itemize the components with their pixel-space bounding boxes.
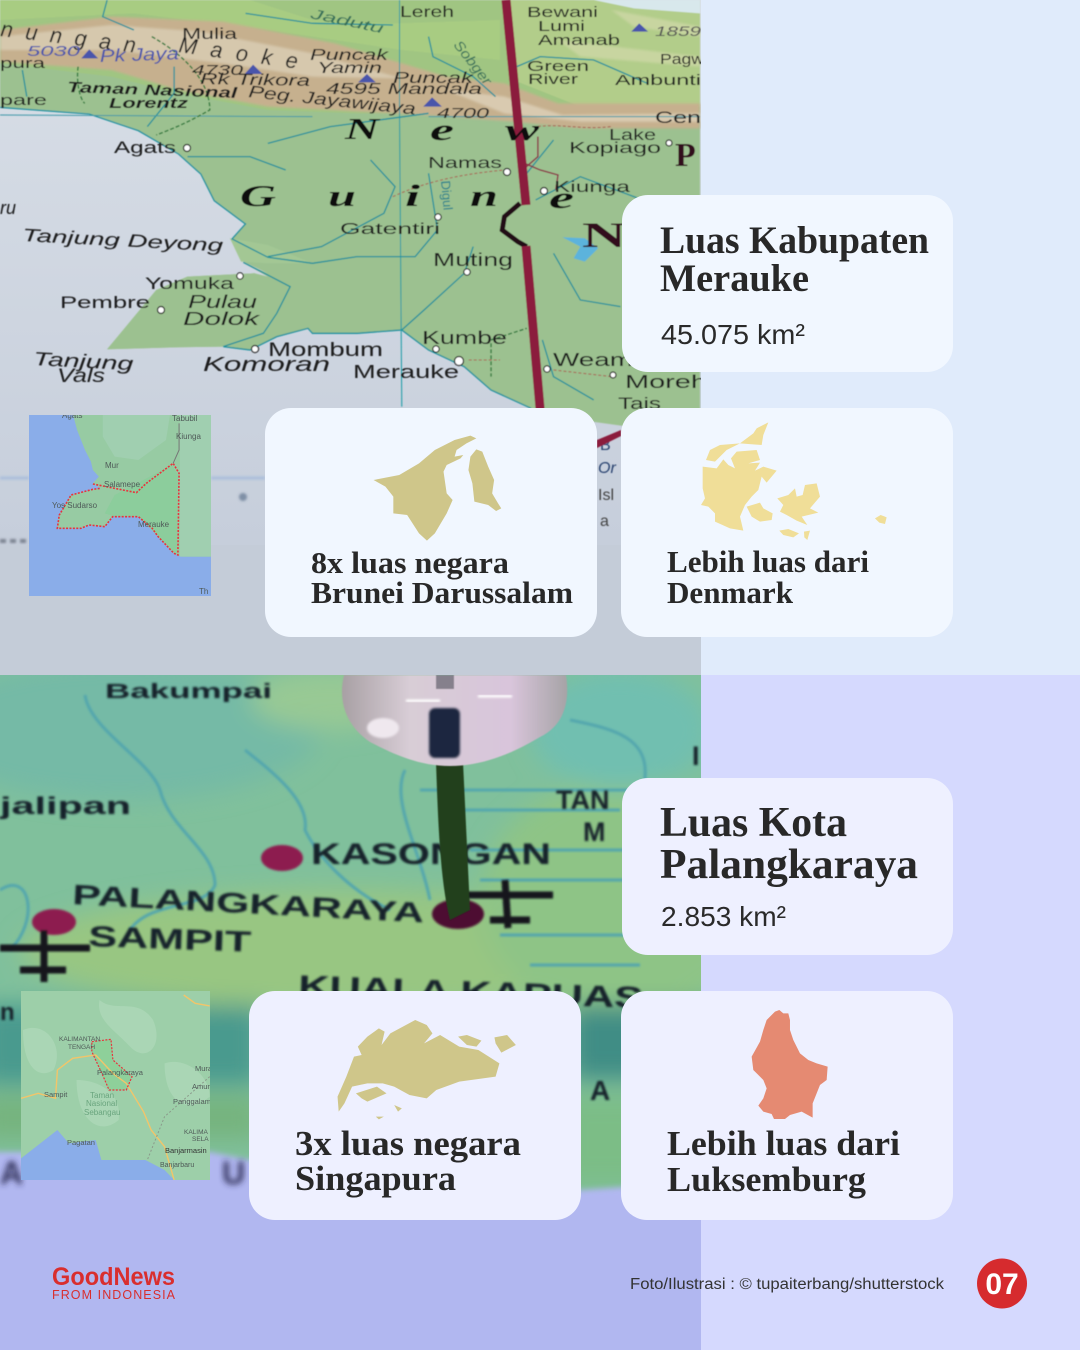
place labels on map: Yamin bbox=[317, 60, 382, 77]
blurred place labels: A bbox=[590, 1075, 610, 1106]
blurred place labels: U bbox=[222, 1155, 245, 1191]
blurred place labels: n bbox=[0, 999, 15, 1026]
place labels on map: Namas bbox=[428, 155, 502, 172]
place labels on map: Amanab bbox=[538, 32, 620, 49]
place labels on map: Or bbox=[598, 460, 616, 477]
icon: Luxembourg silhouette bbox=[752, 1010, 828, 1119]
place labels on map: M a o k e bbox=[177, 32, 300, 74]
place labels on map: Mombum bbox=[268, 340, 383, 361]
place labels on map: Jadutu bbox=[308, 5, 385, 36]
background: top left strip under map bbox=[0, 545, 701, 675]
comparison text: Lebih luas dari bbox=[667, 544, 869, 579]
place labels on map: 4730 bbox=[192, 62, 244, 79]
place labels on map: Pembre bbox=[60, 293, 150, 312]
map colour fields bbox=[0, 675, 701, 1187]
thumbnail map: Palangkaraya: Palangkaraya bbox=[97, 1068, 144, 1077]
comparison text second line: Brunei Darussalam bbox=[311, 575, 573, 610]
thumbnail map: Palangkaraya bbox=[21, 991, 213, 1180]
land mass bbox=[0, 63, 701, 426]
place labels on map: 1859 bbox=[655, 23, 701, 39]
thumbnail map: Palangkaraya: Mura bbox=[195, 1064, 213, 1073]
place labels on map: Pulau bbox=[188, 292, 257, 312]
card: Denmark comparison bbox=[621, 408, 953, 637]
thumbnail map: Merauke bbox=[29, 411, 211, 596]
heading: Luas Kota bbox=[660, 800, 847, 846]
card: Singapore comparison bbox=[249, 991, 581, 1220]
place labels on map: Sobger bbox=[451, 37, 496, 89]
thumbnail map: Palangkaraya: KALIMA bbox=[184, 1129, 209, 1136]
background: top right panel bbox=[701, 0, 1080, 675]
background: footer left strip bbox=[0, 1220, 701, 1350]
place labels on map bbox=[0, 4, 707, 530]
thumbnail map: Merauke: Merauke bbox=[138, 520, 170, 529]
photo: pin on map of Central Kalimantan bbox=[0, 675, 701, 1220]
thumbnail map: Palangkaraya: Banjarmasin bbox=[165, 1146, 207, 1155]
place labels on map: Kopiago bbox=[569, 140, 661, 157]
comparison text: 8x luas negara bbox=[311, 545, 510, 580]
logo: GoodNews from Indonesia: FROM INDONESIA bbox=[52, 1288, 176, 1302]
place labels on map: Peg. Jayawijaya bbox=[248, 82, 417, 119]
page number badge: 07 bbox=[985, 1268, 1019, 1301]
comparison text second line: Luksemburg bbox=[667, 1160, 867, 1199]
blurred place labels: TAN bbox=[556, 785, 610, 815]
photo: physical map of New Guinea bbox=[0, 0, 707, 545]
place labels on map: Lake bbox=[609, 127, 656, 144]
place labels on map: Tais bbox=[618, 394, 661, 413]
place labels on map: pura bbox=[0, 55, 46, 72]
place labels on map: Pk Jaya bbox=[99, 43, 179, 66]
blurred place labels: M bbox=[583, 817, 606, 847]
thumbnail map: Palangkaraya: Banjarbaru bbox=[160, 1162, 194, 1169]
card: Luas Kota Palangkaraya bbox=[622, 778, 953, 955]
thumbnail map: Merauke: Tabubil bbox=[172, 414, 198, 423]
thumbnail map: Palangkaraya: Amun bbox=[192, 1082, 212, 1091]
place labels on map: 5030 bbox=[27, 43, 81, 60]
card: Luas Kabupaten Merauke bbox=[622, 195, 953, 372]
place labels on map: Cen bbox=[655, 108, 701, 127]
thumbnail map: Palangkaraya: Panggalam bbox=[173, 1097, 211, 1106]
place labels on map: w bbox=[505, 112, 540, 147]
place labels on map: Komoran bbox=[203, 354, 330, 376]
thumbnail map: Palangkaraya: Sampit bbox=[44, 1090, 68, 1099]
thumbnail map: Merauke: Mur bbox=[105, 461, 119, 470]
place labels on map: e bbox=[549, 180, 574, 215]
blurred place labels: A bbox=[0, 1155, 23, 1191]
blurred graticule and stray marks in lower sea bbox=[0, 478, 265, 541]
logo: GoodNews from Indonesia: GoodNews bbox=[52, 1263, 175, 1291]
rivers bbox=[0, 695, 645, 965]
logo: GoodNews from Indonesia bbox=[52, 1263, 176, 1302]
blurred place labels: Bakumpai bbox=[105, 681, 272, 703]
area value: 45.075 km² bbox=[661, 319, 805, 350]
place labels on map: Tanjung bbox=[33, 349, 134, 375]
photo credit: Foto/Ilustrasi : © tupaiterbang/shutterstock bbox=[630, 1276, 944, 1293]
blurred place labels: I bbox=[692, 741, 700, 771]
thumbnail map: Merauke: Agats bbox=[62, 411, 82, 420]
place labels on map: Lorentz bbox=[109, 95, 189, 112]
thumbnail map: Palangkaraya: Pagatan bbox=[67, 1138, 95, 1147]
thumbnail map: Merauke: Kiunga bbox=[176, 432, 201, 441]
place labels on map: a bbox=[600, 513, 609, 530]
place labels on map: B bbox=[600, 437, 611, 454]
place labels on map: Agats bbox=[114, 138, 176, 157]
place labels on map: ru bbox=[0, 198, 16, 218]
thumbnail map: Palangkaraya: Nasional bbox=[86, 1099, 117, 1108]
place labels on map: Lereh bbox=[400, 4, 454, 21]
place labels on map: Weam bbox=[553, 350, 633, 370]
place labels on map: Mulia bbox=[182, 26, 237, 43]
mountain triangles bbox=[81, 23, 648, 107]
heading: Luas Kabupaten bbox=[660, 219, 929, 262]
place labels on map: Muting bbox=[433, 250, 513, 270]
place labels on map: Dolok bbox=[183, 309, 261, 329]
blurred place labels: SAMPIT bbox=[88, 921, 252, 959]
plane icon near Sampit bbox=[0, 930, 90, 982]
icon: Denmark silhouette bbox=[701, 422, 887, 540]
place labels on map: n bbox=[470, 178, 498, 213]
background: bottom right panel bbox=[701, 675, 1080, 1350]
plane icon near Palangkaraya bbox=[465, 880, 553, 928]
thumbnail map: Merauke: Th bbox=[199, 587, 208, 596]
blurred place labels: KASONGAN bbox=[311, 838, 551, 871]
place labels on map: Puncak bbox=[393, 70, 474, 87]
place labels on map: Moreh bbox=[625, 372, 707, 392]
place labels on map: Kumbe bbox=[422, 328, 507, 348]
place labels on map: u bbox=[328, 178, 356, 213]
place labels on map: n u n g a n bbox=[0, 16, 137, 58]
place labels on map: Vals bbox=[57, 366, 106, 387]
heading second line: Merauke bbox=[660, 257, 809, 300]
place labels on map: pare bbox=[0, 92, 47, 109]
comparison text: 3x luas negara bbox=[295, 1124, 521, 1163]
thumbnail map: Palangkaraya: Sebangau bbox=[84, 1108, 120, 1117]
thumbnail map: Merauke: Salamepe bbox=[104, 480, 141, 489]
blurred place labels: jalipan bbox=[0, 793, 131, 820]
place labels on map: Rk Trikora bbox=[200, 71, 310, 90]
border line bbox=[501, 0, 545, 408]
place labels on map: River bbox=[528, 71, 578, 88]
pin needle bbox=[436, 762, 470, 920]
sea at bottom of photo bbox=[0, 1148, 646, 1220]
comparison text second line: Singapura bbox=[295, 1159, 456, 1198]
place labels on map: Kiunga bbox=[554, 179, 630, 196]
place labels on map: 4700 bbox=[437, 105, 490, 122]
place labels on map: Gatentiri bbox=[340, 221, 440, 238]
thumbnail map: Merauke: Yos Sudarso bbox=[52, 501, 98, 510]
area value: 2.853 km² bbox=[661, 901, 786, 932]
rivers and coastline bbox=[0, 107, 531, 408]
place labels on map: Taman Nasional bbox=[67, 79, 239, 102]
place labels on map: N bbox=[343, 111, 381, 146]
card: Luxembourg comparison bbox=[621, 991, 953, 1220]
card: Brunei comparison bbox=[265, 408, 597, 637]
place labels on map: Green bbox=[527, 58, 589, 75]
place labels on map: i bbox=[405, 178, 421, 213]
thumbnail map: Palangkaraya: Taman bbox=[90, 1091, 114, 1100]
icon: Singapore silhouette bbox=[338, 1020, 516, 1119]
place labels on map: Ambunti bbox=[615, 72, 701, 89]
place labels on map: Digul bbox=[438, 180, 456, 211]
place labels on map: Yomuka bbox=[145, 274, 235, 293]
blurred place labels bbox=[0, 681, 700, 1191]
place labels on map: Lumi bbox=[538, 18, 585, 35]
place labels on map: G bbox=[240, 178, 277, 213]
place labels on map: Puncak bbox=[310, 47, 389, 64]
page number badge bbox=[977, 1258, 1027, 1308]
place labels on map: P bbox=[675, 137, 696, 174]
place labels on map: Tanjung Deyong bbox=[22, 225, 224, 256]
place labels on map: Bewani bbox=[527, 4, 598, 21]
comparison text: Lebih luas dari bbox=[667, 1124, 900, 1163]
place labels on map: Pagw bbox=[660, 51, 704, 68]
heading second line: Palangkaraya bbox=[660, 842, 918, 888]
place labels on map: Isl bbox=[598, 487, 614, 504]
place labels on map: Merauke bbox=[353, 362, 459, 382]
blurred place labels: KUALA KAPUAS bbox=[298, 970, 644, 1015]
place labels on map: e bbox=[430, 112, 454, 147]
icon: Brunei silhouette bbox=[374, 436, 501, 541]
blurred place labels: PALANGKARAYA bbox=[72, 879, 425, 928]
pin head bbox=[342, 675, 567, 766]
comparison text second line: Denmark bbox=[667, 575, 794, 610]
place labels on map: N bbox=[582, 215, 626, 255]
place labels on map: 4595 Mandala bbox=[326, 81, 482, 98]
thumbnail map: Palangkaraya: KALIMANTAN bbox=[59, 1036, 100, 1043]
thumbnail map: Palangkaraya: SELA bbox=[192, 1136, 209, 1143]
thumbnail map: Palangkaraya: TENGAH bbox=[68, 1044, 95, 1051]
